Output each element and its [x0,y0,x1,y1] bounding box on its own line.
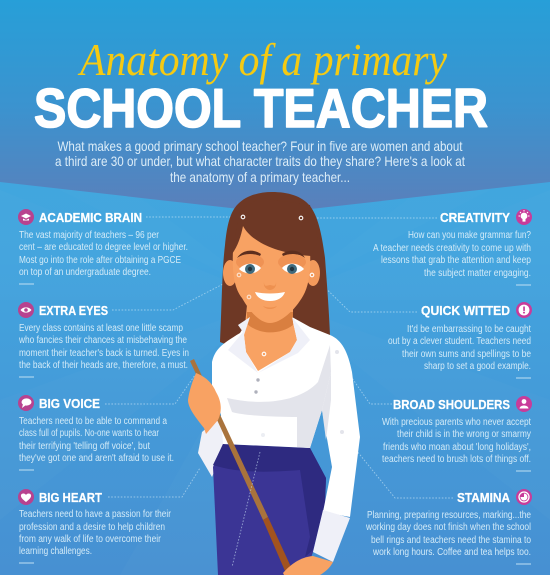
panel: stamina [365,489,532,564]
panel: big heart [18,489,172,563]
mouth [255,292,285,301]
body text: class full of pupils. No-one wants to hear [19,428,160,439]
collar left [228,317,258,373]
body text [18,323,189,371]
anatomy markers [237,215,344,437]
panel: broad shoulders [382,396,532,471]
icon: stopwatch [516,489,532,505]
body text [19,509,172,557]
body text [365,510,531,558]
skirt shadow band [213,444,326,557]
shirt shadows [227,345,331,448]
hair back [220,192,330,350]
icon: heart [18,489,34,505]
body text: profession and a desire to help children [19,522,165,533]
body text: sharp to set a good example. [424,361,531,372]
icon: speech bubble [18,395,34,411]
connector lines [105,217,453,498]
body text: their terrifying 'telling off voice', but [19,441,150,452]
icon: eye [18,302,34,318]
panel: quick witted [388,302,532,378]
heading: EXTRA EYES [39,303,108,318]
fringe [232,198,318,256]
body text: the back of their heads are, therefore, a must. [19,360,188,371]
body text: moment their teacher's back is turned. Eyes in [19,348,189,359]
body text: Every class contains at least one little scamp [19,323,183,334]
pointer lower [263,517,291,571]
body text: Teachers need to have a passion for their [19,509,172,520]
right cuff [313,510,350,562]
heading: ACADEMIC BRAIN [39,210,142,225]
body text: cent – are educated to degree level or higher. [19,242,188,253]
eyebrows [237,251,261,258]
face [233,225,310,323]
icon: graduation cap [18,209,34,225]
panel: extra eyes [18,302,189,377]
collar right [258,317,310,373]
body text [19,416,174,464]
neck shadow [247,312,293,332]
body text [373,230,531,279]
heading: QUICK WITTED [421,303,510,318]
pointer upper [190,359,268,520]
heading: BROAD SHOULDERS [393,397,510,412]
eye shadow [236,254,264,270]
panel: creativity [373,209,532,285]
intro text: a third are 30 or under, but what character traits do they share? Here's a look at [55,153,465,169]
body text: on top of an undergraduate degree. [19,267,151,278]
teacher illustration [188,192,360,575]
buttons [256,378,260,382]
lower hand [283,556,333,575]
lower dashed [232,452,260,567]
title: bold line: SCHOOL TEACHER [34,77,488,139]
right sleeve inner fold [322,372,331,440]
body text: learning challenges. [19,546,92,557]
intro text: What makes a good primary school teacher? Four in five are women and about [58,138,463,154]
left hand lower sleeve [198,415,226,477]
neck [244,305,297,371]
intro text: the anatomy of a primary teacher... [170,169,350,185]
icon: light bulb [516,209,532,225]
heading: BIG VOICE [39,396,100,411]
body text [19,230,188,278]
shirt body [212,317,360,517]
body text [388,324,531,372]
skirt [213,444,326,575]
title: script line: Anatomy of a primary [77,34,448,85]
nose [264,282,276,290]
icon: person [516,396,532,412]
body text: Teachers need to be able to command a [19,416,167,427]
ears [223,260,237,286]
panel: big voice [18,395,174,470]
upper hand [188,373,221,434]
panel: academic brain [18,209,188,284]
heading: STAMINA [457,490,511,505]
header banner [0,0,550,213]
body text: who fancies their chances at misbehaving the [18,335,187,346]
intro text [55,138,465,185]
lower lip shadow [263,306,277,309]
icon: exclamation [516,302,532,318]
body text [382,417,531,465]
heading: BIG HEART [39,490,102,505]
eyes [239,264,261,273]
body text: they've got one and aren't afraid to use it. [19,453,174,464]
body text: The vast majority of teachers – 96 per [19,230,160,241]
body text: from any walk of life to overcome their [19,534,162,545]
body text: Most go into the role after obtaining a PGCE [19,255,181,266]
body text: the subject matter engaging. [424,268,531,279]
heading: CREATIVITY [440,210,510,225]
